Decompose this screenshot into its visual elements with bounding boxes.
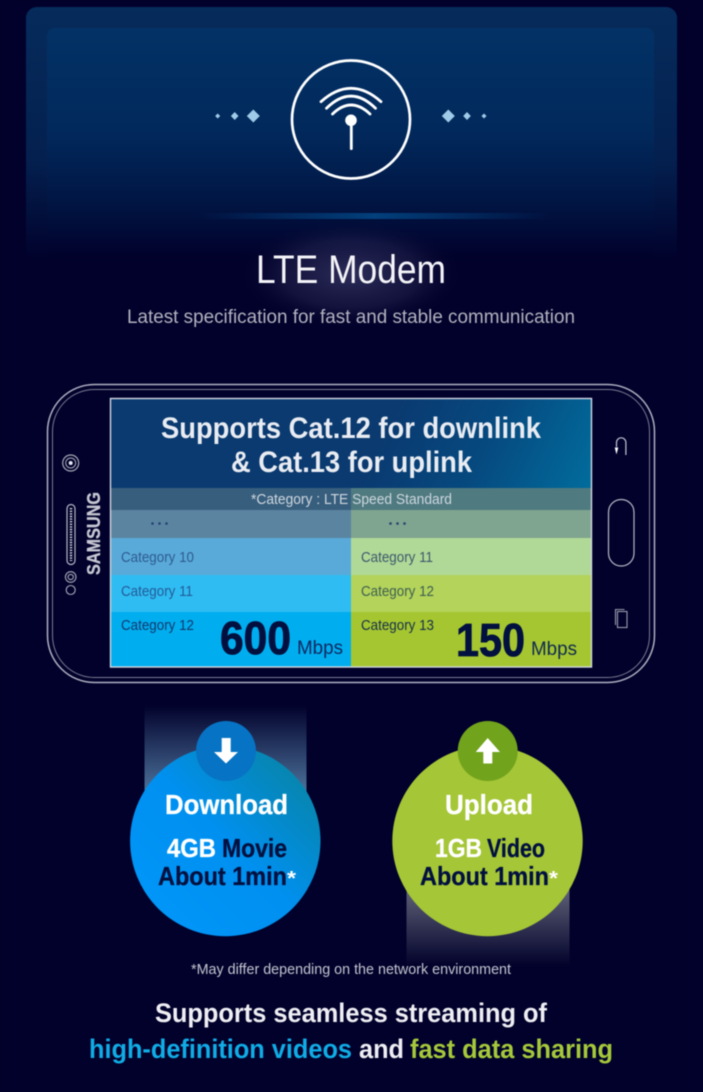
panel: phone screen	[110, 398, 592, 667]
icon: right diamonds	[442, 110, 486, 122]
table: download categories: 600	[220, 612, 291, 664]
headline: Supports Cat.12 for downlink	[161, 412, 542, 445]
brand: SAMSUNG: SAMSUNG	[84, 492, 104, 575]
screen headline band	[110, 398, 592, 488]
table: upload categories: Category 13	[361, 617, 434, 634]
callout: download: *	[287, 868, 296, 890]
footnote: *May differ depending on the network environment	[191, 961, 512, 978]
icon: back key	[615, 438, 626, 455]
upload beam	[406, 880, 570, 966]
callout: upload	[392, 721, 583, 936]
table: download categories: Mbps	[297, 638, 343, 659]
icon: home key	[608, 500, 634, 566]
title: LTE Modem	[256, 248, 446, 292]
icon: recents key	[616, 610, 627, 628]
table: upload categories	[351, 510, 592, 667]
table: download categories: Category 10	[121, 549, 194, 566]
callout: download: 4GB	[167, 833, 216, 863]
download beam	[144, 705, 306, 800]
glowing divider line	[198, 213, 550, 219]
subtitle: Latest specification for fast and stable communication	[127, 307, 575, 328]
icon: upload arrow	[458, 721, 518, 781]
table: upload categories: 150	[456, 614, 525, 666]
table: download categories	[110, 510, 351, 667]
closing statement: fast data sharing	[410, 1034, 613, 1064]
table: upload categories: Category 12	[361, 583, 434, 600]
phone body outline	[48, 384, 654, 682]
phone illustration	[48, 384, 654, 682]
icon: left diamonds	[215, 110, 260, 122]
callout: download: Movie	[222, 833, 287, 863]
icon: download arrow	[196, 721, 256, 781]
callout: upload: *	[549, 868, 558, 890]
phone camera	[63, 455, 79, 471]
icon: LTE antenna in circle	[292, 60, 410, 178]
table: upload categories: Mbps	[531, 639, 577, 660]
callout: upload: About 1min	[420, 861, 549, 891]
table: download categories: Category 12	[121, 617, 194, 634]
closing statement: high-definition videos	[89, 1034, 352, 1064]
table: download categories: Category 11	[121, 583, 193, 600]
callout: download: About 1min	[158, 861, 287, 891]
table: upload categories: Category 11	[361, 549, 433, 566]
phone sensors	[65, 572, 76, 594]
closing statement: Supports seamless streaming of	[155, 998, 548, 1028]
category note band: *Category : LTE Speed Standard	[251, 491, 452, 508]
callout: upload: Video	[487, 833, 545, 863]
panel: header backdrop	[26, 7, 677, 262]
headline: & Cat.13 for uplink	[231, 446, 473, 479]
callout: upload: 1GB	[435, 833, 482, 863]
category note band	[110, 488, 592, 510]
phone speaker	[67, 504, 75, 564]
screen border	[110, 398, 592, 667]
callout: download: Download	[165, 789, 288, 820]
closing statement: and	[359, 1034, 404, 1064]
callout: download	[130, 721, 320, 936]
title glow	[236, 218, 466, 330]
closing statement	[89, 998, 613, 1064]
callout: upload: Upload	[445, 789, 533, 820]
